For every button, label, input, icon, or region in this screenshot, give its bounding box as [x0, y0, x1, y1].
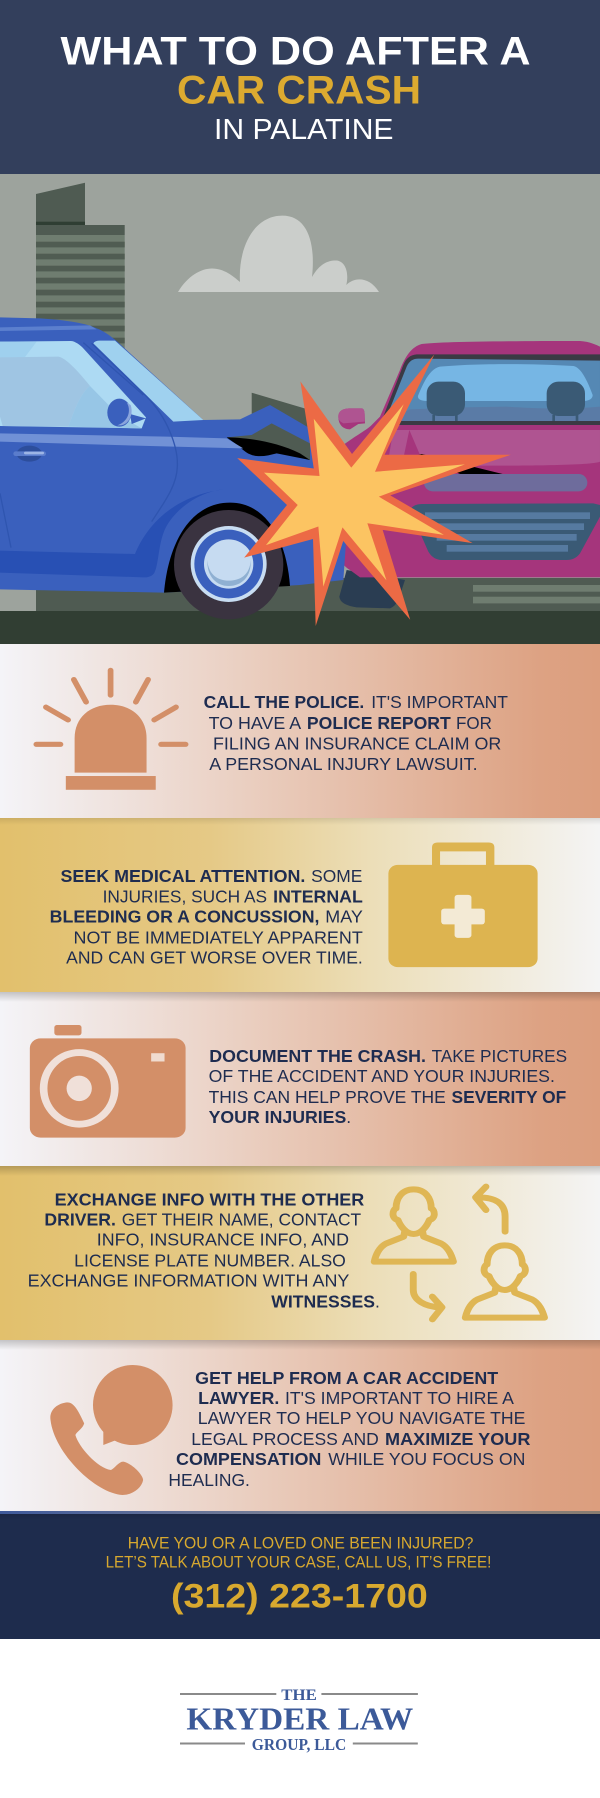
logo — [180, 1687, 418, 1754]
title: IN PALATINE — [214, 114, 394, 146]
text: get help from a lawyer: WHILE YOU FOCUS ON — [328, 1449, 525, 1469]
text: seek medical attention: INJURIES, SUCH AS — [103, 886, 267, 906]
text: call the police: FILING AN INSURANCE CLAIM OR — [213, 733, 501, 753]
text: document the crash — [209, 1046, 567, 1127]
header panel — [0, 0, 600, 174]
text: seek medical attention: BLEEDING OR A CONCUSSION, — [50, 906, 319, 926]
text: call the police: FOR — [456, 713, 492, 733]
text: get help from a lawyer — [168, 1368, 531, 1490]
text: call the police: A PERSONAL INJURY LAWSUIT. — [209, 754, 478, 774]
icon: siren — [36, 670, 186, 790]
text: call the police: POLICE REPORT — [307, 713, 451, 733]
text: get help from a lawyer: LEGAL PROCESS AND — [191, 1429, 379, 1449]
text: exchange info: EXCHANGE INFO WITH THE OTHER — [55, 1190, 365, 1210]
call to action text: HAVE YOU OR A LOVED ONE BEEN INJURED? — [128, 1534, 473, 1552]
call to action text — [106, 1534, 491, 1571]
illustration: car crash scene — [0, 174, 600, 644]
icon: camera — [30, 1025, 186, 1138]
title: WHAT TO DO AFTER A — [60, 29, 530, 73]
icon: two people exchanging — [374, 1187, 545, 1319]
text: exchange info — [28, 1190, 380, 1312]
text: get help from a lawyer: MAXIMIZE YOUR — [385, 1429, 531, 1449]
text: exchange info: GET THEIR NAME, CONTACT — [122, 1210, 361, 1230]
text: document the crash: DOCUMENT THE CRASH. — [209, 1046, 426, 1066]
panel: call the police — [0, 644, 600, 818]
text: get help from a lawyer: LAWYER TO HELP YOU NAVIGATE THE — [198, 1408, 525, 1428]
text: seek medical attention: AND CAN GET WORSE OVER TIME. — [66, 947, 363, 967]
text: get help from a lawyer: HEALING. — [168, 1470, 250, 1490]
wheel — [164, 503, 290, 619]
text: document the crash: . — [346, 1107, 351, 1127]
text: seek medical attention: SEEK MEDICAL ATTENTION. — [60, 866, 305, 886]
icon: phone and speech bubble — [50, 1365, 173, 1495]
text: seek medical attention — [50, 866, 363, 967]
text: exchange info: EXCHANGE INFORMATION WITH ANY — [28, 1271, 350, 1291]
text: seek medical attention: INTERNAL — [273, 886, 363, 906]
text: document the crash: SEVERITY OF — [452, 1087, 567, 1107]
explosion — [237, 354, 511, 626]
text: document the crash: THIS CAN HELP PROVE THE — [209, 1087, 446, 1107]
logo: KRYDER LAW — [186, 1700, 413, 1736]
text: call the police: CALL THE POLICE. — [204, 692, 364, 712]
text: seek medical attention: SOME — [311, 866, 362, 886]
text: call the police — [204, 692, 508, 774]
text: document the crash: YOUR INJURIES — [209, 1107, 346, 1127]
title: CAR CRASH — [177, 69, 421, 113]
text: exchange info: . — [375, 1292, 380, 1312]
text: call the police: TO HAVE A — [209, 713, 302, 733]
text: get help from a lawyer: IT'S IMPORTANT TO HIRE A — [285, 1388, 514, 1408]
logo: GROUP, LLC — [252, 1735, 346, 1754]
text: exchange info: WITNESSES — [271, 1292, 375, 1312]
text: document the crash: OF THE ACCIDENT AND YOUR INJURIES. — [209, 1066, 555, 1086]
cloud — [178, 216, 379, 292]
panel: exchange info — [0, 1166, 600, 1340]
building — [36, 183, 310, 470]
text: get help from a lawyer: LAWYER. — [198, 1388, 279, 1408]
title — [60, 29, 530, 146]
text: exchange info: DRIVER. — [44, 1210, 116, 1230]
logo: THE — [281, 1687, 317, 1704]
panel: call to action — [0, 1511, 600, 1639]
text: call the police: IT'S IMPORTANT — [371, 692, 508, 712]
icon: first aid kit — [388, 842, 538, 967]
text: seek medical attention: NOT BE IMMEDIATELY APPARENT — [74, 927, 363, 947]
blue car — [0, 317, 347, 593]
panel: seek medical attention — [0, 818, 600, 992]
text: document the crash: TAKE PICTURES — [432, 1046, 567, 1066]
pink car — [338, 341, 600, 608]
panel: get help from a lawyer — [0, 1340, 600, 1511]
panel: document the crash — [0, 992, 600, 1166]
road — [0, 578, 600, 644]
text: seek medical attention: MAY — [325, 906, 363, 926]
call to action text: LET’S TALK ABOUT YOUR CASE, CALL US, IT’S FREE! — [106, 1553, 491, 1571]
text: get help from a lawyer: GET HELP FROM A CAR ACCIDENT — [195, 1368, 499, 1388]
text: exchange info: LICENSE PLATE NUMBER. ALSO — [74, 1251, 346, 1271]
text: exchange info: INFO, INSURANCE INFO, AND — [97, 1230, 349, 1250]
text: get help from a lawyer: COMPENSATION — [176, 1449, 321, 1469]
phone number: (312) 223-1700 — [171, 1577, 428, 1615]
